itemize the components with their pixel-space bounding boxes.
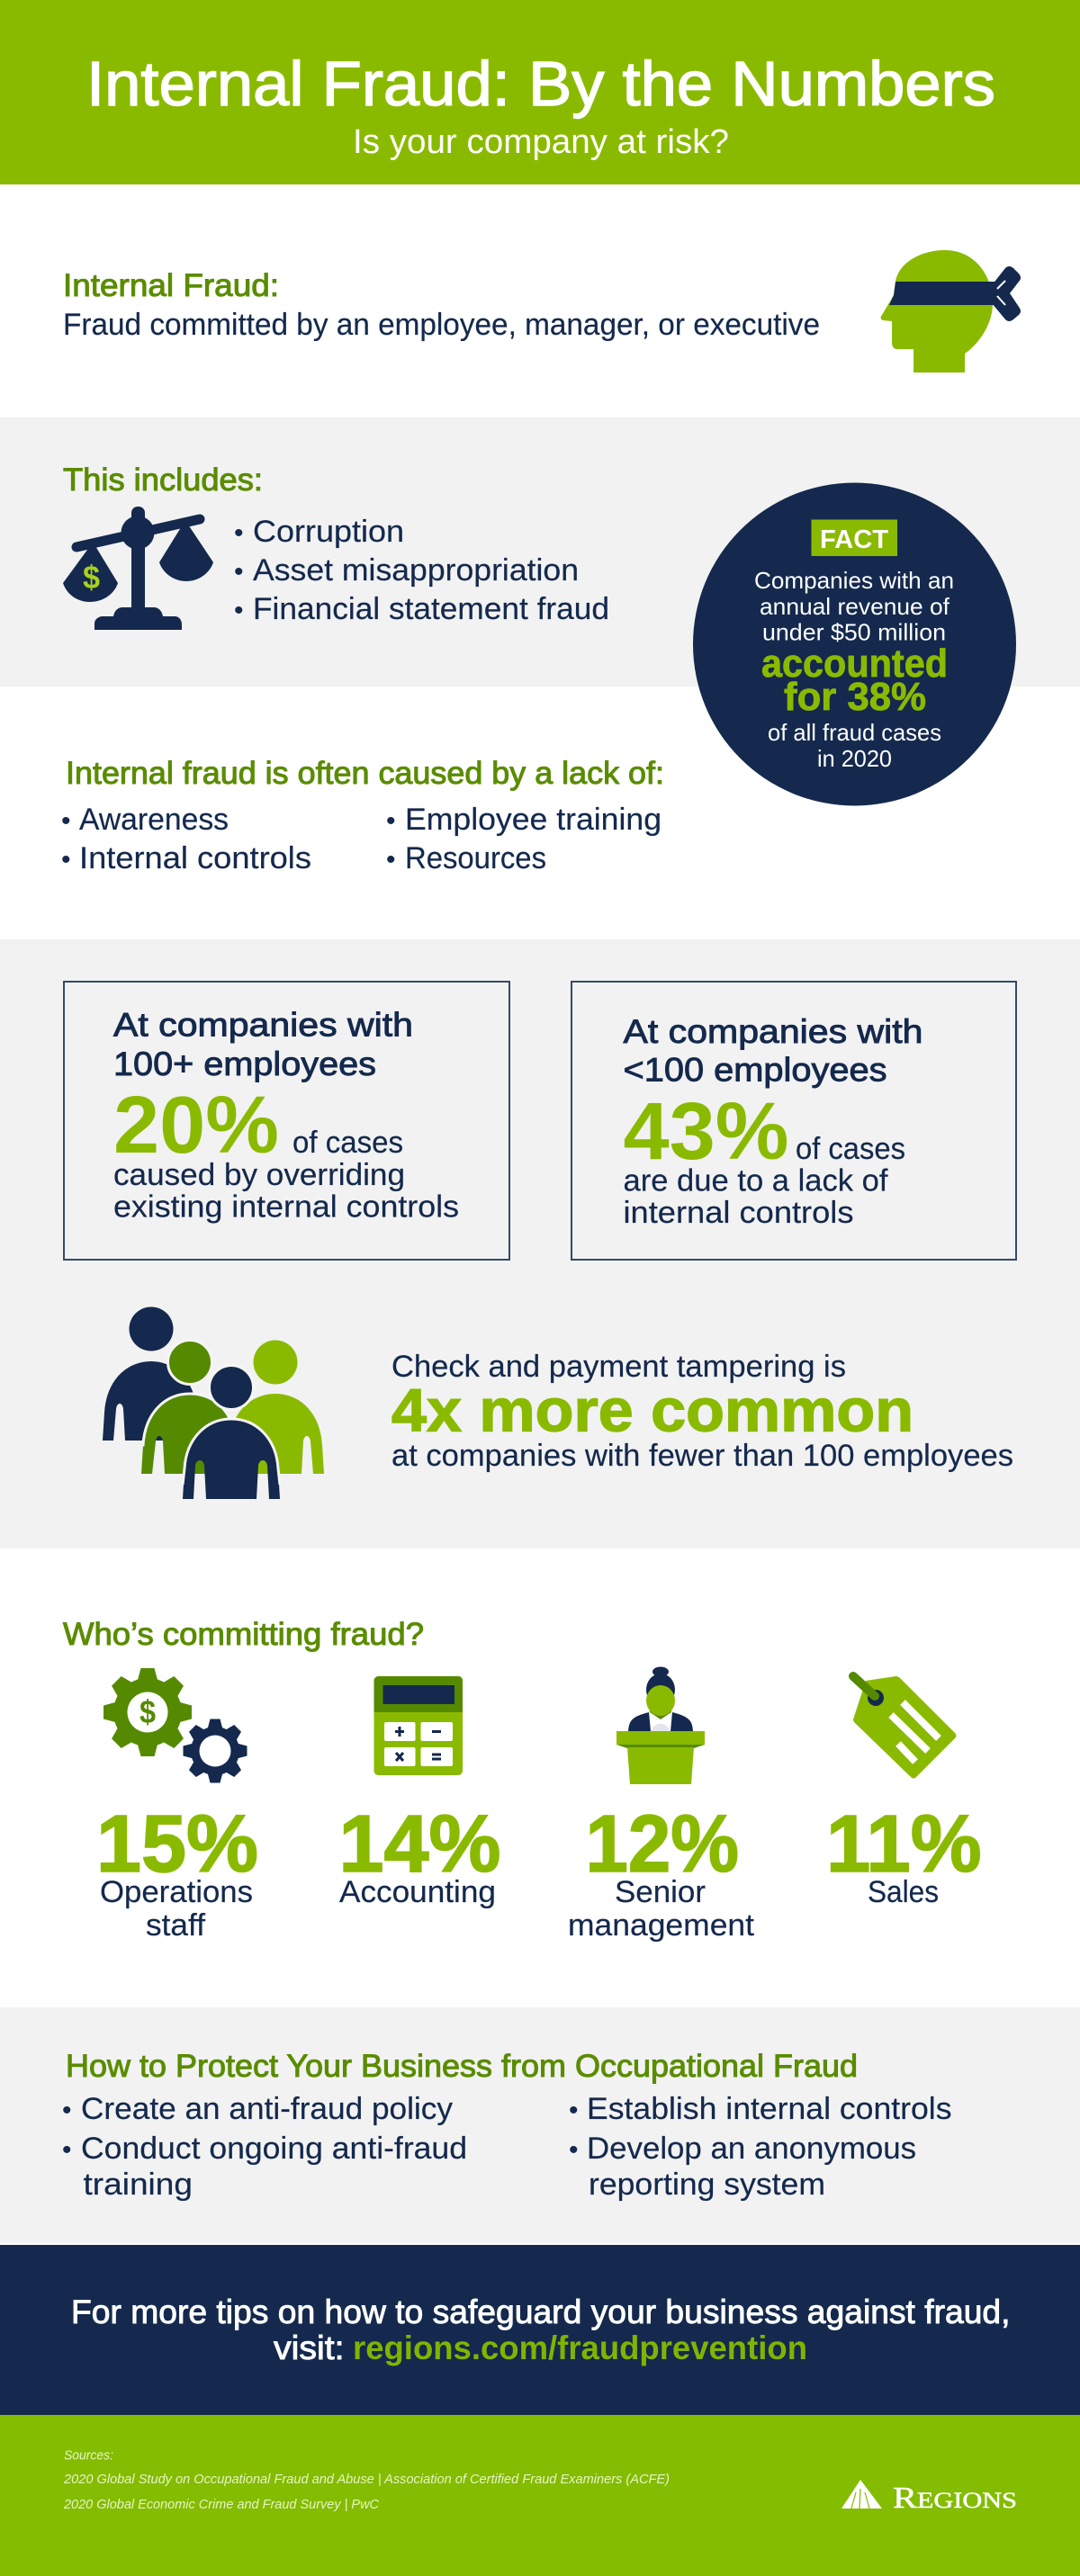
sources (63, 2447, 670, 2512)
protect list right: Establish internal controls (587, 2092, 952, 2126)
panel: call to action (0, 2245, 1080, 2415)
definition heading: Internal Fraud: (63, 268, 279, 303)
icon: gears with dollar sign (104, 1668, 247, 1783)
who heading: Who’s committing fraud? (63, 1617, 424, 1652)
causes list: • (386, 845, 396, 875)
panel: how to protect your business (0, 2007, 1080, 2243)
subtitle: Is your company at risk? (353, 123, 729, 161)
includes list: • (234, 518, 244, 548)
panel: call to action: regions.com/fraudprevention (353, 2329, 807, 2366)
stat box: 100+ employees: 20% (113, 1081, 279, 1171)
icon: balance scale with money bag: $ (83, 559, 100, 596)
stat box: 100+ employees: caused by overriding (113, 1158, 405, 1192)
callout: fact circle: accounted (761, 642, 948, 686)
includes list: Financial statement fraud (253, 592, 609, 626)
stat: accounting: Accounting (339, 1875, 496, 1909)
icon: calculator (374, 1676, 463, 1775)
icon: executive at podium (616, 1666, 705, 1784)
stat box: 100+ employees: 100+ employees (113, 1046, 376, 1082)
sources: Sources: (64, 2447, 113, 2464)
stat: operations staff: Operations (100, 1875, 253, 1909)
panel: this includes (0, 417, 1080, 687)
stat: senior management: management (568, 1908, 755, 1943)
panel: call to action: For more tips on how to safeguard your business against fraud, (71, 2293, 1010, 2330)
includes heading: This includes: (63, 462, 263, 498)
protect list right: • (569, 2096, 579, 2125)
sources: 2020 Global Economic Crime and Fraud Survey | PwC (63, 2497, 379, 2512)
panel: definition (63, 250, 1021, 372)
protect list left (62, 2092, 467, 2202)
stat box: under 100 employees: <100 employees (623, 1051, 887, 1089)
protect list right (569, 2092, 952, 2202)
header banner (0, 0, 1080, 184)
callout: fact circle: FACT (820, 525, 888, 554)
stat: operations staff: staff (146, 1908, 206, 1943)
panel: causes (61, 756, 664, 875)
stat box: 100+ employees: At companies with (113, 1006, 413, 1044)
icon: price tag (853, 1676, 956, 1778)
icon: group of people (103, 1306, 324, 1499)
causes heading: Internal fraud is often caused by a lack of: (66, 756, 664, 791)
stat box: under 100 employees: 43% (623, 1087, 788, 1177)
sources: 2020 Global Study on Occupational Fraud and Abuse | Association of Certified Fraud Examiners (ACFE) (63, 2472, 670, 2487)
protect list right: Develop an anonymous (587, 2132, 916, 2166)
causes list: Employee training (405, 803, 662, 837)
callout: fact circle: for 38% (784, 675, 926, 719)
callout: fact circle: Companies with an (754, 567, 954, 594)
stat: senior management (568, 1800, 755, 1943)
stat box: under 100 employees (572, 982, 1016, 1260)
icon: gears with dollar sign: $ (140, 1693, 156, 1730)
panel: company size statistics (0, 939, 1080, 1548)
callout: fact circle: under $50 million (762, 619, 946, 646)
panel: footer (0, 2415, 1080, 2576)
protect list left: • (62, 2096, 72, 2125)
includes list (234, 515, 609, 626)
stat: accounting: 14% (338, 1800, 500, 1889)
callout: fact circle: annual revenue of (760, 593, 950, 620)
protect list right: reporting system (589, 2168, 825, 2202)
stat box: under 100 employees: are due to a lack of (623, 1164, 888, 1198)
stat box: under 100 employees: At companies with (623, 1013, 923, 1050)
protect list left: Conduct ongoing anti-fraud (81, 2132, 467, 2166)
protect list left: Create an anti-fraud policy (81, 2092, 453, 2126)
icon: blindfolded head (881, 250, 1021, 372)
protect list right: • (569, 2135, 579, 2165)
includes list: Asset misappropriation (253, 553, 579, 588)
causes list: • (61, 845, 71, 875)
causes list: • (61, 806, 71, 836)
protect list left: training (83, 2168, 193, 2202)
callout: fact circle: in 2020 (817, 745, 892, 772)
tampering statement: 4x more common (392, 1377, 914, 1445)
tampering statement (392, 1350, 1013, 1473)
stat: operations staff (96, 1800, 258, 1943)
stat: senior management: Senior (615, 1875, 706, 1909)
causes list: Awareness (79, 803, 229, 837)
includes list: • (234, 557, 244, 587)
callout: fact circle (693, 482, 1016, 806)
logo: Regions (842, 2480, 1017, 2515)
tampering statement: Check and payment tampering is (392, 1350, 846, 1384)
definition text: Fraud committed by an employee, manager, or executive (63, 308, 820, 342)
logo: Regions: REGIONS (893, 2482, 1017, 2515)
includes list: • (234, 596, 244, 625)
stat box: under 100 employees: internal controls (623, 1196, 853, 1230)
protect list left: • (62, 2135, 72, 2165)
panel: call to action: visit: (274, 2329, 344, 2366)
stat: sales: 11% (826, 1800, 981, 1889)
stat box: under 100 employees: of cases (796, 1132, 905, 1166)
stat: operations staff: 15% (96, 1800, 258, 1889)
includes list: Corruption (253, 515, 404, 549)
panel: who is committing fraud (63, 1617, 981, 1943)
protect heading: How to Protect Your Business from Occupational Fraud (66, 2049, 858, 2084)
causes list: Resources (405, 841, 546, 875)
causes list: • (386, 806, 396, 836)
tampering statement: at companies with fewer than 100 employees (392, 1439, 1013, 1473)
stat box: 100+ employees: existing internal controls (113, 1189, 459, 1224)
causes list (61, 803, 662, 875)
title: Internal Fraud: By the Numbers (86, 49, 995, 119)
stat: sales: Sales (868, 1875, 939, 1909)
stat: senior management: 12% (585, 1800, 739, 1889)
stat box: 100+ employees: of cases (292, 1126, 403, 1160)
stat box: 100+ employees (64, 982, 509, 1260)
causes list: Internal controls (79, 841, 311, 875)
icon: balance scale with money bag (63, 507, 213, 630)
callout: fact circle: of all fraud cases (768, 719, 941, 746)
